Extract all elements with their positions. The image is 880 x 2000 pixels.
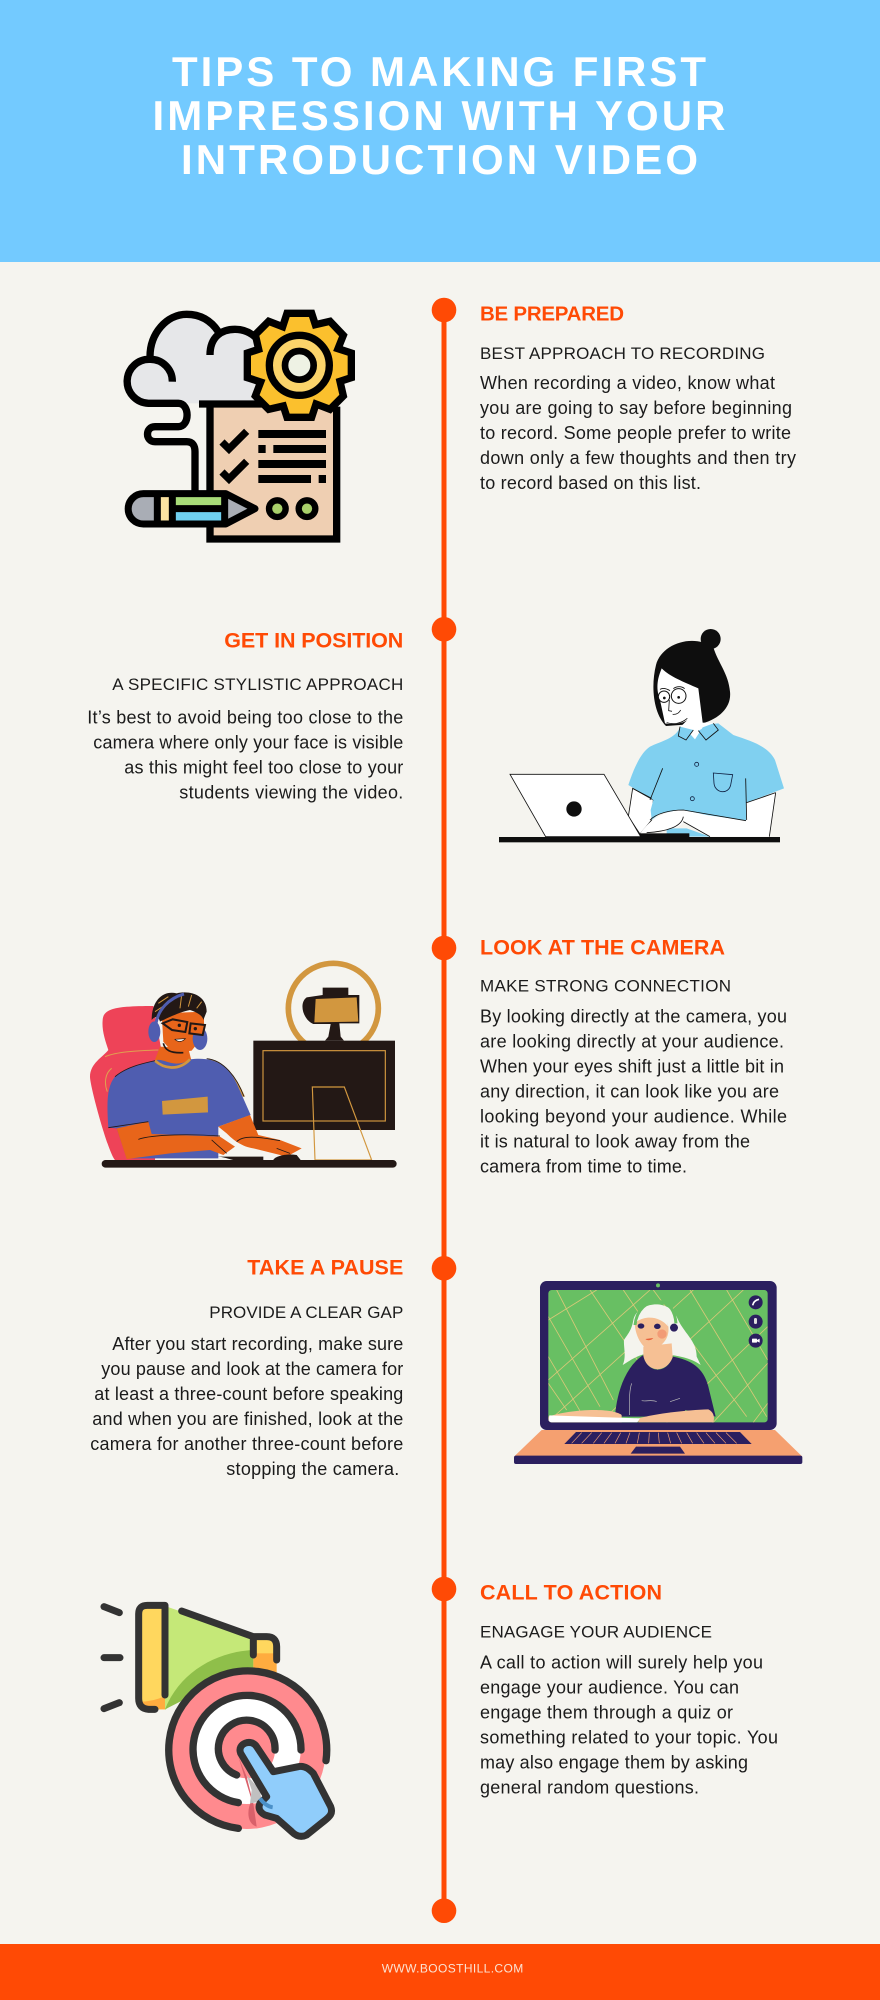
text: get in position — [87, 628, 403, 802]
footer: WWW.BOOSTHILL.COM — [382, 1962, 523, 1976]
panel: take a pause — [90, 1255, 802, 1479]
footer — [0, 1944, 880, 2000]
text: call to action: ENAGAGE YOUR AUDIENCE — [480, 1622, 712, 1641]
panel: be prepared — [127, 303, 796, 539]
text: look at the camera: are looking directly at your audience. — [480, 1031, 784, 1051]
text: be prepared: down only a few thoughts and then try — [480, 448, 796, 468]
icon: woman at laptop — [499, 629, 784, 842]
text: call to action: may also engage them by asking — [480, 1752, 748, 1772]
text: be prepared — [480, 303, 796, 493]
text: get in position: A SPECIFIC STYLISTIC APPROACH — [112, 675, 403, 694]
panel: get in position — [87, 628, 784, 842]
text: take a pause: you pause and look at the camera for — [101, 1359, 403, 1379]
text: call to action: A call to action will surely help you — [480, 1652, 763, 1672]
text: get in position: camera where only your face is visible — [93, 732, 403, 752]
icon: streamer at monitor — [90, 963, 397, 1168]
text: look at the camera: it is natural to look away from the — [480, 1131, 750, 1151]
icon: checklist, cloud and gear — [127, 313, 351, 539]
text: take a pause: and when you are finished, look at the — [92, 1409, 403, 1429]
text: take a pause: stopping the camera. — [226, 1459, 399, 1479]
text: call to action: engage them through a quiz or — [480, 1702, 733, 1722]
text: look at the camera: looking beyond your audience. While — [480, 1106, 787, 1126]
text: take a pause: at least a three-count before speaking — [94, 1384, 403, 1404]
icon: video call on laptop — [514, 1281, 802, 1464]
text: look at the camera: LOOK AT THE CAMERA — [480, 935, 725, 959]
text: take a pause: TAKE A PAUSE — [247, 1255, 403, 1279]
title: INTRODUCTION VIDEO — [181, 136, 698, 183]
title: TIPS TO MAKING FIRST — [172, 48, 706, 95]
text: call to action: something related to your topic. You — [480, 1727, 778, 1747]
text: be prepared: BEST APPROACH TO RECORDING — [480, 344, 765, 363]
text: get in position: It’s best to avoid being too close to the — [87, 707, 403, 727]
text: call to action: general random questions. — [480, 1777, 699, 1797]
text: look at the camera: camera from time to time. — [480, 1156, 687, 1176]
text: call to action: engage your audience. You can — [480, 1677, 739, 1697]
text: be prepared: BE PREPARED — [480, 303, 624, 326]
text: look at the camera: any direction, it can look like you are — [480, 1081, 779, 1101]
panel: call to action — [104, 1580, 778, 1836]
header banner — [0, 0, 880, 262]
text: look at the camera: When your eyes shift just a little bit in — [480, 1056, 784, 1076]
text: call to action — [480, 1580, 778, 1797]
text: take a pause: camera for another three-count before — [90, 1434, 403, 1454]
title — [152, 48, 726, 183]
text: be prepared: to record based on this list. — [480, 473, 701, 493]
panel: look at the camera — [90, 935, 787, 1176]
text: look at the camera: MAKE STRONG CONNECTION — [480, 977, 731, 996]
title: IMPRESSION WITH YOUR — [152, 92, 726, 139]
icon: megaphone and target with hand — [104, 1605, 332, 1836]
text: take a pause: PROVIDE A CLEAR GAP — [209, 1303, 403, 1322]
text: be prepared: When recording a video, know what — [480, 373, 775, 393]
text: look at the camera: By looking directly at the camera, you — [480, 1006, 787, 1026]
text: get in position: students viewing the video. — [179, 782, 403, 802]
text: take a pause — [90, 1255, 403, 1479]
text: take a pause: After you start recording, make sure — [112, 1334, 403, 1354]
text: call to action: CALL TO ACTION — [480, 1580, 662, 1604]
text: look at the camera — [480, 935, 787, 1176]
timeline — [432, 298, 456, 1923]
text: be prepared: to record. Some people prefer to write — [480, 423, 791, 443]
text: get in position: as this might feel too close to your — [124, 757, 403, 777]
text: be prepared: you are going to say before beginning — [480, 398, 792, 418]
text: get in position: GET IN POSITION — [224, 628, 403, 652]
